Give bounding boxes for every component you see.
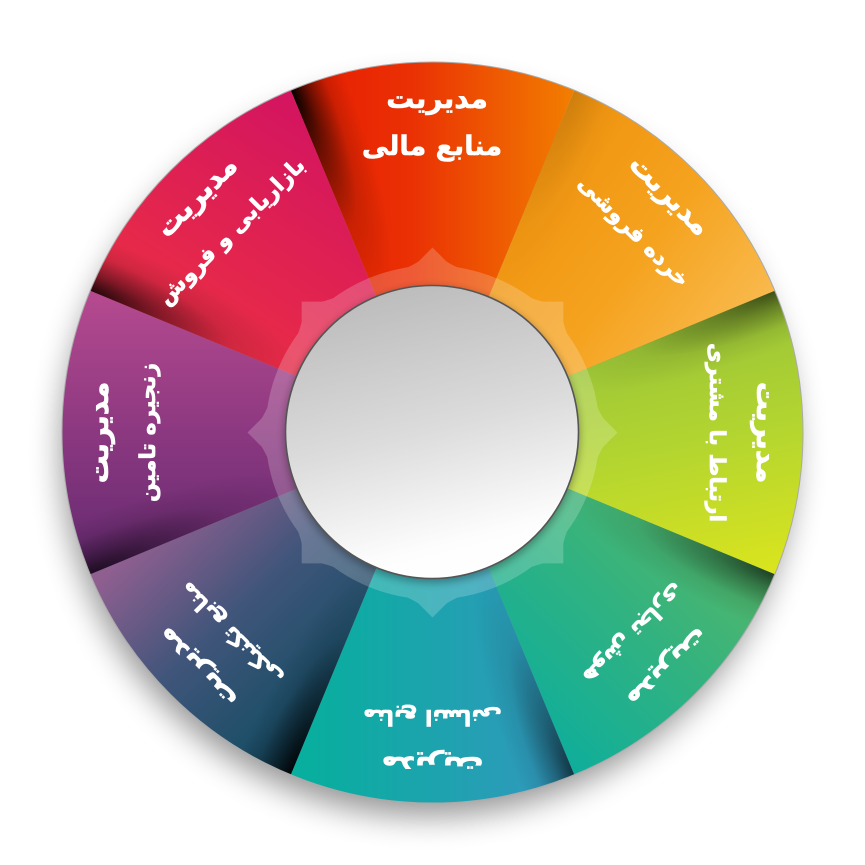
- segment: customer relations: [432, 291, 803, 574]
- segment: supply chain: زنجیره تامین: [136, 363, 161, 502]
- segment: technical resources: منابع تکنیکی: [175, 576, 289, 690]
- wheel: [62, 62, 803, 803]
- segment: human resources: منابع انسانی: [363, 704, 502, 729]
- segment: retail management: مدیریت: [622, 147, 718, 243]
- segment: marketing and sales: [70, 70, 533, 533]
- segment: marketing and sales: مدیریت: [149, 149, 244, 244]
- segment: technical resources: مدیریت: [149, 621, 244, 716]
- center disc shadow: [284, 287, 580, 583]
- segment: financial resources: منابع مالی: [362, 131, 502, 162]
- drop shadow of wheel: [62, 84, 794, 816]
- segment: technical resources: [70, 332, 533, 795]
- segment: business intelligence: [332, 332, 795, 795]
- center disc: [286, 286, 578, 578]
- segment: supply chain: [62, 291, 433, 574]
- segment: business intelligence: هوش تجاری: [578, 578, 689, 689]
- segment: retail management: [332, 70, 795, 533]
- segment: business intelligence: مدیریت: [621, 621, 716, 716]
- segment: customer relations: ارتباط با مشتری: [704, 343, 729, 522]
- segment: human resources: مدیریت: [382, 750, 483, 783]
- segment: financial resources: مدیریت: [386, 82, 488, 115]
- translucent star ring: [248, 248, 618, 618]
- segment: retail management: خرده فروشی: [572, 171, 694, 293]
- segment: financial resources: [291, 62, 574, 433]
- segment: marketing and sales: بازاریابی و فروش: [153, 153, 310, 310]
- wheel edge: [62, 62, 803, 803]
- segment: supply chain: مدیریت: [82, 382, 115, 483]
- segment: human resources: [291, 432, 574, 803]
- segment: customer relations: مدیریت: [750, 382, 783, 483]
